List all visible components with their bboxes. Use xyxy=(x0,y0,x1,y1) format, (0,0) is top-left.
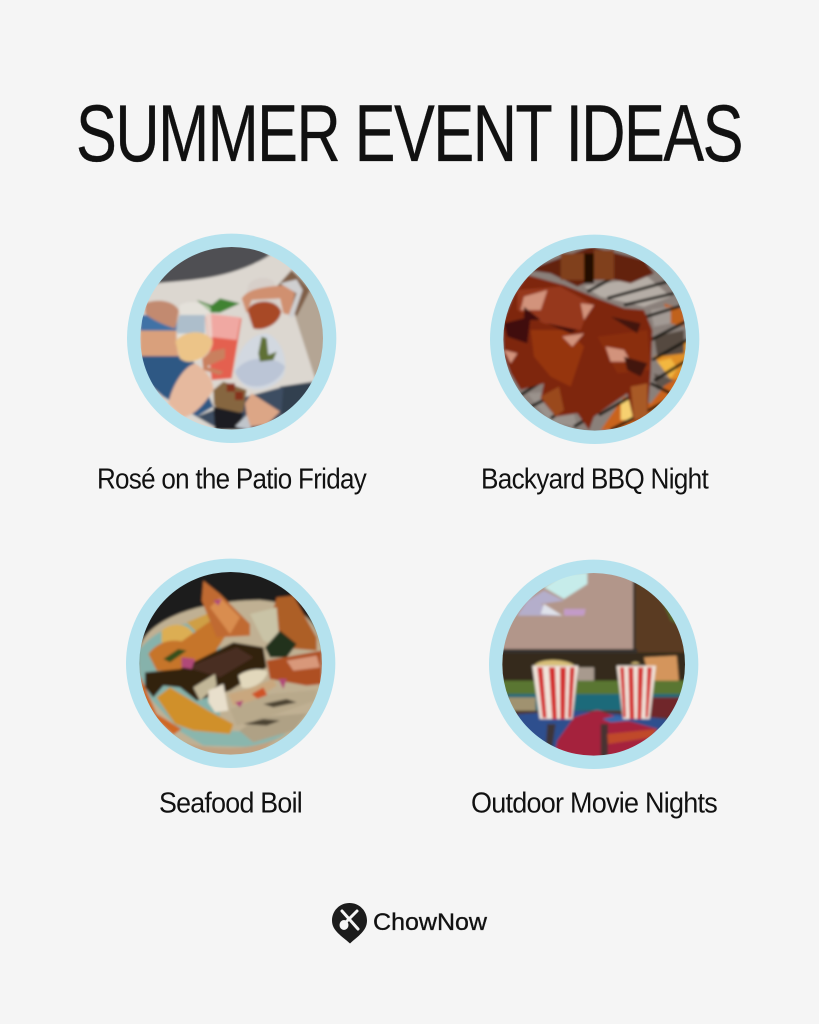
panel: Rosé on the Patio Friday xyxy=(97,230,367,496)
photo: friends toasting drinks xyxy=(120,230,340,450)
photo: barbecued chicken on grill xyxy=(484,230,704,450)
photo: outdoor movie screen and popcorn xyxy=(484,554,704,774)
panel: Backyard BBQ Night xyxy=(481,230,709,496)
wordmark: ChowNow xyxy=(373,909,488,936)
label: Outdoor Movie Nights: Outdoor Movie Nights xyxy=(471,788,717,820)
logo: ChowNow xyxy=(332,903,488,944)
label: Rosé on the Patio Friday: Rosé on the Patio Friday xyxy=(97,464,367,496)
panel: Outdoor Movie Nights xyxy=(471,554,717,820)
icon: location pin with fork and spoon xyxy=(332,903,367,944)
label: Seafood Boil: Seafood Boil xyxy=(159,788,302,820)
photo: seafood platter xyxy=(120,554,340,774)
panel: Seafood Boil xyxy=(120,554,340,820)
label: Backyard BBQ Night: Backyard BBQ Night xyxy=(481,464,709,496)
